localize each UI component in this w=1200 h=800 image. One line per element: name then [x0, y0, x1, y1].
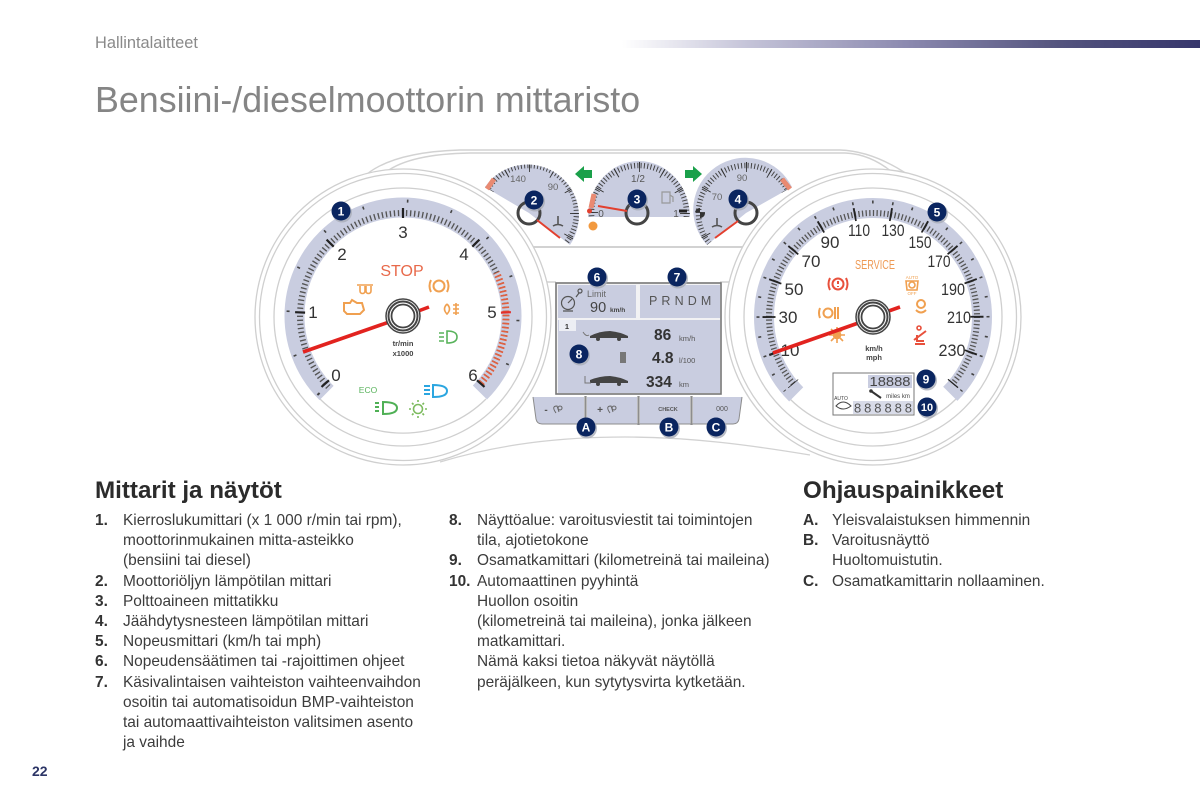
list: items 8 to 10: Huollon osoitin — [477, 593, 578, 610]
tachometer — [284, 198, 522, 418]
list: items 8 to 10: 9. — [449, 552, 462, 569]
list: items 8 to 10: Näyttöalue: varoitusviestit tai toimintojen — [477, 512, 752, 529]
number badges: 2 — [531, 194, 538, 208]
tachometer scale numbers: 2 — [337, 245, 347, 264]
title: Bensiini-/dieselmoottorin mittaristo — [95, 80, 640, 120]
speed limit readout — [587, 289, 625, 316]
list: items 1 to 7: (bensiini tai diesel) — [123, 552, 251, 569]
odometer display: 888888 — [854, 400, 912, 416]
list: items 1 to 7: 7. — [95, 674, 108, 691]
number badges: 3 — [634, 192, 641, 206]
trip computer readout: 86 — [654, 327, 672, 344]
oil temperature gauge: 140 — [510, 174, 526, 185]
number badges: 10 — [921, 402, 933, 414]
tachometer scale numbers: 1 — [308, 303, 318, 322]
speedometer scale numbers: 10 — [781, 341, 799, 360]
page number: 22 — [32, 763, 48, 779]
speedometer unit label: km/h — [865, 344, 883, 353]
arrow: left turn indicator — [575, 166, 592, 182]
number badges: 9 — [923, 372, 930, 386]
control buttons: 000 — [716, 406, 728, 413]
trip computer readout: 4.8 — [652, 350, 674, 367]
list: items 8 to 10: (kilometreinä tai maileina), jonka jälkeen — [477, 613, 752, 630]
speed limit readout: km/h — [610, 307, 625, 314]
cluster housing outline — [367, 150, 907, 282]
list: items 8 to 10: Nämä kaksi tietoa näkyvät näytöllä — [477, 653, 715, 670]
oil temperature gauge — [485, 164, 579, 245]
list: items 8 to 10: Osamatkamittari (kilometreinä tai maileina) — [477, 552, 770, 569]
trip computer readout: l/100 — [679, 356, 695, 365]
trip computer readout — [646, 327, 695, 391]
list: items 1 to 7: 4. — [95, 613, 108, 630]
list: items 8 to 10: 10. — [449, 573, 470, 590]
tachometer scale numbers — [308, 223, 497, 385]
gear indicator: PRNDM — [649, 294, 715, 308]
control buttons: - — [544, 405, 548, 416]
list: items A to C: Varoitusnäyttö — [832, 532, 930, 549]
fuel gauge: 0 — [598, 209, 604, 220]
list: items 1 to 7: Nopeusmittari (km/h tai mph) — [123, 633, 321, 650]
list: items 1 to 7: 6. — [95, 653, 108, 670]
coolant temperature gauge: 90 — [737, 173, 747, 184]
speedometer unit label: mph — [866, 353, 882, 362]
auto labels: OFF — [908, 291, 917, 296]
speedometer unit label — [865, 344, 883, 362]
list: items A to C: B. — [803, 532, 818, 549]
speedometer — [754, 198, 992, 416]
tachometer unit label — [393, 339, 414, 358]
speedometer scale numbers: 150 — [908, 233, 932, 252]
list: items A to C — [803, 512, 1045, 590]
lower housing curve — [440, 437, 810, 462]
speedometer needle — [773, 307, 900, 353]
tachometer needle — [303, 307, 429, 352]
trip computer readout: km/h — [679, 334, 695, 343]
list: items A to C: Osamatkamittarin nollaaminen. — [832, 573, 1045, 590]
list: items 8 to 10: Automaattinen pyyhintä — [477, 573, 638, 590]
list: items 8 to 10: 8. — [449, 512, 462, 529]
fuel gauge: 1/2 — [631, 174, 645, 185]
number badges: B — [665, 420, 674, 434]
list: items 1 to 7: Polttoaineen mittatikku — [123, 593, 278, 610]
speedometer scale numbers: 210 — [947, 308, 971, 327]
tachometer scale numbers: 3 — [398, 223, 408, 242]
list: items 8 to 10: peräjälkeen, kun sytytysvirta kytketään. — [477, 674, 746, 691]
list: items 1 to 7: Käsivalintaisen vaihteiston vaihteenvaihdon — [123, 674, 421, 691]
section label: Hallintalaitteet — [95, 34, 198, 52]
list: items 1 to 7: osoitin tai automatisoidun BMP-vaihteiston — [123, 694, 414, 711]
speedometer scale numbers — [779, 221, 971, 360]
list: items 8 to 10 — [449, 512, 770, 691]
list: items 1 to 7: moottorinmukainen mitta-asteikko — [123, 532, 354, 549]
list: items A to C: Huoltomuistutin. — [832, 552, 943, 569]
speedometer scale numbers: 50 — [785, 280, 803, 299]
list: items 1 to 7: Kierroslukumittari (x 1 000 r/min tai rpm), — [123, 512, 402, 529]
speedometer scale numbers: 70 — [802, 252, 820, 271]
arrow: right turn indicator — [685, 166, 702, 182]
ECO indicator: ECO — [359, 385, 378, 395]
list: items 1 to 7: 1. — [95, 512, 108, 529]
speedometer scale numbers: 230 — [938, 341, 966, 360]
speedometer scale numbers: 30 — [779, 308, 797, 327]
right gauge rings — [725, 169, 1021, 465]
low fuel light — [588, 222, 598, 230]
speed limit readout: Limit — [587, 289, 607, 299]
speedometer scale numbers: 130 — [882, 221, 904, 240]
trip computer readout: km — [679, 380, 689, 389]
number badges: 8 — [576, 348, 583, 362]
speedometer scale numbers: 170 — [928, 252, 950, 271]
auto labels: AUTO — [906, 275, 919, 280]
number badges: 7 — [674, 270, 681, 284]
list: items A to C: A. — [803, 512, 818, 529]
fuel gauge — [587, 161, 690, 226]
speedometer warning icons — [819, 278, 926, 344]
list: items 1 to 7: 3. — [95, 593, 108, 610]
list: items 8 to 10: tila, ajotietokone — [477, 532, 589, 549]
list: items 1 to 7: Jäähdytysnesteen lämpötilan mittari — [123, 613, 368, 630]
tachometer unit label: tr/min — [393, 339, 414, 348]
number badges — [332, 190, 948, 438]
odometer display — [833, 373, 914, 416]
tachometer scale numbers: 4 — [459, 245, 469, 264]
instrument cluster diagram — [254, 149, 1022, 466]
number badges: A — [582, 420, 591, 434]
cruise control icon — [562, 289, 582, 311]
odometer display: AUTO — [834, 396, 848, 402]
coolant temperature gauge — [693, 158, 792, 245]
service indicator: SERVICE — [855, 257, 895, 272]
central display — [556, 283, 721, 394]
tachometer warning icons — [344, 280, 459, 418]
tachometer scale numbers: 5 — [487, 303, 497, 322]
list: items 1 to 7: Moottoriöljyn lämpötilan mittari — [123, 573, 331, 590]
control buttons: CHECK — [658, 407, 678, 413]
car icons — [590, 331, 628, 386]
odometer display: miles km — [886, 394, 910, 400]
list: items A to C: Yleisvalaistuksen himmennin — [832, 512, 1030, 529]
tachometer scale numbers: 6 — [468, 366, 478, 385]
left gauge rings — [255, 169, 551, 465]
header gradient bar — [622, 40, 1200, 48]
oil temperature gauge: 90 — [548, 182, 558, 193]
number badges: 5 — [934, 206, 941, 220]
speed limit readout: 90 — [590, 300, 606, 316]
auto labels — [906, 275, 919, 296]
list: items 8 to 10: matkamittari. — [477, 633, 565, 650]
trip computer readout: 334 — [646, 374, 672, 391]
speedometer hub — [856, 300, 890, 334]
speedometer scale numbers: 90 — [821, 233, 839, 252]
list: items 1 to 7: tai automaattivaihteiston valitsimen asento — [123, 714, 413, 731]
speedometer scale numbers: 190 — [941, 280, 965, 299]
fuel gauge: 1 — [673, 209, 679, 220]
control buttons: + — [597, 405, 603, 416]
list: items 1 to 7: ja vaihde — [123, 734, 185, 751]
tachometer unit label: x1000 — [393, 349, 413, 358]
heading: gauges and displays: Mittarit ja näytöt — [95, 477, 282, 504]
heading: control buttons: Ohjauspainikkeet — [803, 477, 1003, 504]
list: items 1 to 7: 2. — [95, 573, 108, 590]
speedometer scale numbers: 110 — [848, 221, 870, 240]
stop warning: STOP — [380, 263, 424, 280]
tachometer hub — [386, 299, 420, 333]
list: items 1 to 7: Nopeudensäätimen tai -rajoittimen ohjeet — [123, 653, 404, 670]
list: items A to C: C. — [803, 573, 818, 590]
list: items 1 to 7 — [95, 512, 421, 751]
odometer display: 18888 — [870, 374, 910, 389]
list: items 1 to 7: 5. — [95, 633, 108, 650]
control buttons — [533, 396, 742, 425]
number badges: 4 — [735, 192, 742, 206]
number badges: C — [712, 420, 721, 434]
central display: 1 — [565, 322, 569, 331]
tachometer scale numbers: 0 — [331, 366, 341, 385]
coolant temperature gauge: 70 — [712, 192, 722, 203]
number badges: 1 — [338, 204, 345, 218]
number badges: 6 — [594, 270, 601, 284]
